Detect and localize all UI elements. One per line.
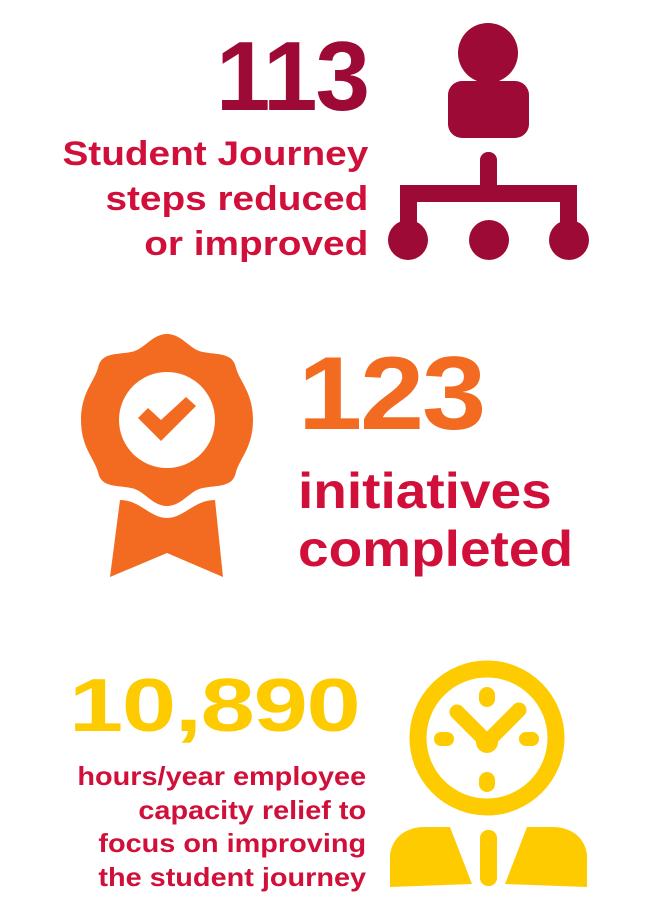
stat 1 label <box>62 135 368 263</box>
stat 3 label: the student journey <box>98 862 366 892</box>
stat 3 number: 10,890 <box>69 663 359 747</box>
stat 3 label: capacity relief to <box>138 794 366 824</box>
stat 1 label: steps reduced <box>105 180 368 218</box>
stat 1 number: 113 <box>216 21 368 131</box>
stat 2 label: initiatives <box>298 463 552 519</box>
stat 3 label: hours/year employee <box>77 761 366 791</box>
stat 3 label <box>77 761 366 892</box>
stat 2 number: 123 <box>298 336 484 452</box>
stat 1 label: or improved <box>144 225 368 263</box>
stat 3 label: focus on improving <box>98 828 366 858</box>
stat 2 label: completed <box>298 521 573 577</box>
stat 2 label <box>298 463 573 577</box>
stat 1 label: Student Journey <box>62 135 368 173</box>
